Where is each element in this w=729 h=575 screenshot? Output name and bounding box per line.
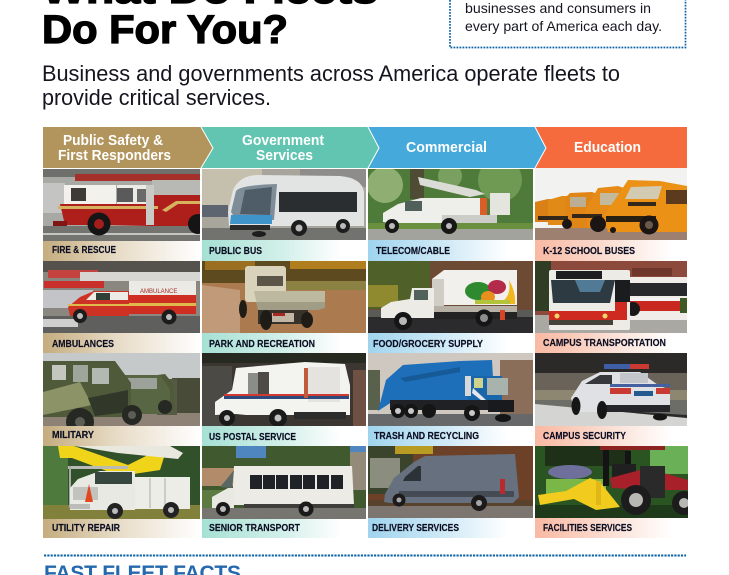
category header: Public Safety & First Responders: First Responders [58,148,171,164]
label: K-12 SCHOOL BUSES [543,246,635,257]
label: PUBLIC BUS [209,246,262,257]
panel: trash and recycling [368,353,533,446]
label: AMBULANCES [52,339,114,350]
category header: Government Services [201,127,379,168]
panel: park and recreation [202,261,366,353]
label bar [202,240,366,261]
label bar [43,241,200,261]
panel: campus transportation [535,261,687,353]
label: DELIVERY SERVICES [372,523,459,534]
title: Do For You? [42,8,288,52]
label: FOOD/GROCERY SUPPLY [373,339,483,350]
panel: campus security [535,353,687,446]
photo: grey delivery van [368,446,533,518]
panel: facilities services [535,446,696,538]
callout: top right box: every part of America each day. [465,18,662,34]
category header: Education: Education [574,140,641,156]
label: PARK AND RECREATION [209,339,315,350]
label: FIRE & RESCUE [52,245,116,256]
photo: yellow boom truck [43,446,200,519]
label bar [535,518,687,538]
photo: campus bus [535,261,687,333]
subtitle: provide critical services. [42,85,271,110]
photo: bucket truck [368,169,533,240]
label bar [535,333,687,353]
label: CAMPUS SECURITY [543,431,626,442]
label bar [202,333,366,353]
panel: food and grocery supply [368,261,533,353]
panel: ambulances [43,261,200,353]
photo: shuttle bus [202,446,366,519]
photo: ambulance: AMBULANCE [140,289,177,295]
label bar [43,426,200,446]
label bar [202,519,366,538]
label: UTILITY REPAIR [52,523,121,534]
category header: Education [535,127,687,168]
panel: military [43,353,200,446]
panel: K-12 school buses [535,168,687,261]
category header: Commercial: Commercial [406,140,487,156]
subtitle: Business and governments across America operate fleets to [42,61,620,86]
label bar [43,333,200,353]
photo: postal truck [202,353,366,426]
subtitle [42,61,620,110]
label: US POSTAL SERVICE [209,432,296,443]
title [42,0,378,52]
category header: Government Services: Government [242,133,324,149]
panel: public bus [202,169,366,261]
panel: utility repair [43,446,200,538]
callout: top right box [450,0,686,48]
photo: security car [535,353,687,426]
photo: produce truck [368,261,533,333]
label bar [43,519,200,538]
category header: Government Services: Services [256,148,313,164]
label bar [202,426,366,446]
label: MILITARY [52,430,94,441]
category header: Public Safety & First Responders: Public Safety & [63,133,163,149]
label bar [535,240,687,261]
callout: top right box: businesses and consumers in [465,0,651,16]
label bar [368,333,533,353]
label: CAMPUS TRANSPORTATION [543,338,666,349]
label bar [535,426,687,446]
photo: tractor with mower [535,446,688,518]
label: FACILITIES SERVICES [543,523,632,534]
label bar [368,426,533,446]
photo: camouflage trucks [43,353,200,426]
panel: US postal service [202,353,366,446]
photo: row of school buses [535,168,687,240]
photo: fire truck [43,169,200,241]
panel: senior transport [202,446,366,538]
label bar [368,518,533,538]
photo: utility cart [202,261,366,333]
photo: city bus [202,169,366,240]
label bar [368,240,533,261]
category header: Commercial [368,127,546,168]
panel: telecom and cable [367,158,533,261]
label: TRASH AND RECYCLING [374,431,479,442]
category header: Public Safety & First Responders [43,127,213,168]
panel: delivery services [368,446,533,538]
label: TELECOM/CABLE [376,246,450,257]
label: SENIOR TRANSPORT [209,523,300,534]
photo: ambulance [43,261,200,333]
photo: garbage truck [368,353,533,426]
panel: fire and rescue [43,169,208,261]
